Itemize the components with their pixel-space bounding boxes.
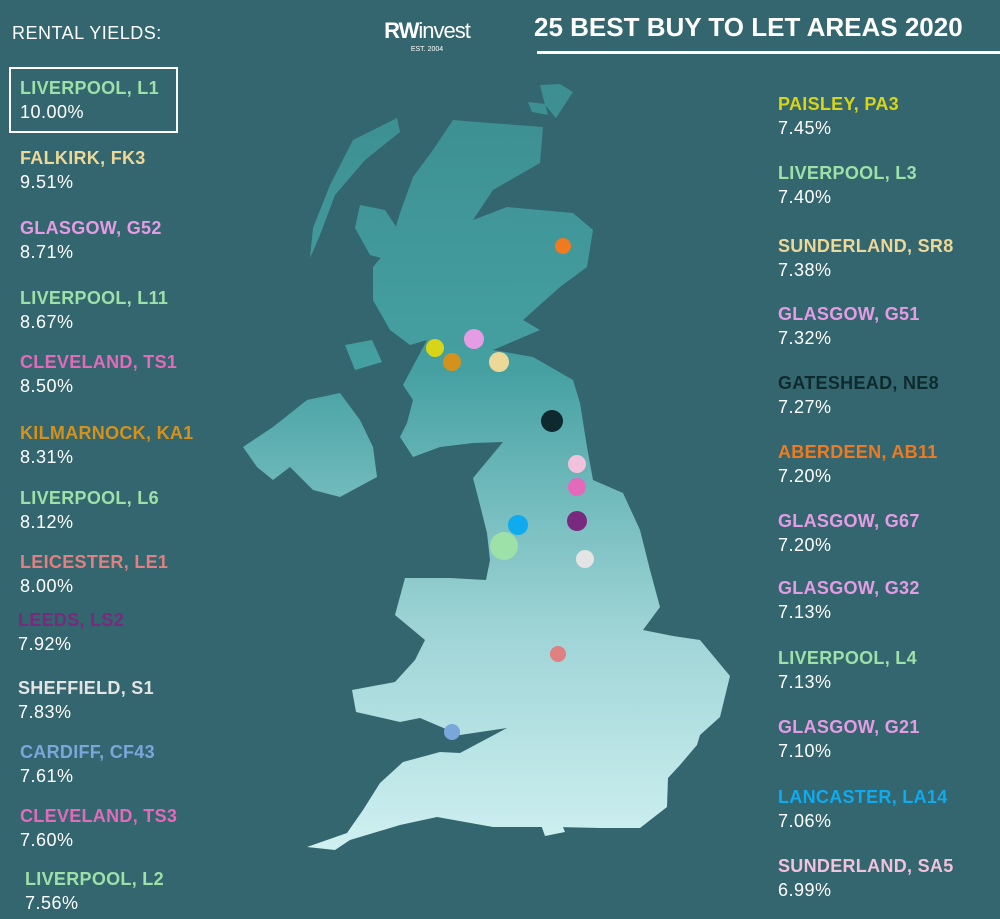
left list: 8.31% xyxy=(20,447,74,467)
right list: SUNDERLAND, SA5 xyxy=(778,856,954,876)
right list xyxy=(778,94,954,900)
left list: SHEFFIELD, S1 xyxy=(18,678,154,698)
right list: 7.13% xyxy=(778,602,832,622)
left list: GLASGOW, G52 xyxy=(20,218,162,238)
left list: 7.83% xyxy=(18,702,72,722)
left list: KILMARNOCK, KA1 xyxy=(20,423,194,443)
left list: LEEDS, LS2 xyxy=(18,610,124,630)
Northern Ireland xyxy=(243,393,377,497)
left list: 9.51% xyxy=(20,172,74,192)
right list: 7.40% xyxy=(778,187,832,207)
right list: 7.45% xyxy=(778,118,832,138)
left list: LEICESTER, LE1 xyxy=(20,552,168,572)
right list: GLASGOW, G32 xyxy=(778,578,920,598)
right list: 7.06% xyxy=(778,811,832,831)
Outer Hebrides xyxy=(310,118,400,258)
right list: PAISLEY, PA3 xyxy=(778,94,899,114)
right list: LANCASTER, LA14 xyxy=(778,787,948,807)
left list: FALKIRK, FK3 xyxy=(20,148,146,168)
left list: 7.60% xyxy=(20,830,74,850)
GB mainland xyxy=(307,120,730,850)
Isle of Wight xyxy=(540,820,565,836)
right list: GATESHEAD, NE8 xyxy=(778,373,939,393)
left list: LIVERPOOL, L11 xyxy=(20,288,168,308)
left list: 8.67% xyxy=(20,312,74,332)
right list: SUNDERLAND, SR8 xyxy=(778,236,954,256)
right list: 7.20% xyxy=(778,466,832,486)
right list: GLASGOW, G21 xyxy=(778,717,920,737)
left list: 10.00% xyxy=(20,102,84,122)
Shetland/Orkney xyxy=(540,84,573,118)
Skye & inner islands xyxy=(355,205,405,262)
right list: GLASGOW, G51 xyxy=(778,304,920,324)
right list: GLASGOW, G67 xyxy=(778,511,920,531)
logo: RWinvest xyxy=(384,18,470,43)
right list: LIVERPOOL, L3 xyxy=(778,163,917,183)
right list: 7.32% xyxy=(778,328,832,348)
left list xyxy=(18,78,194,913)
right list: 7.13% xyxy=(778,672,832,692)
left list: 7.61% xyxy=(20,766,74,786)
right list: 7.38% xyxy=(778,260,832,280)
right list: ABERDEEN, AB11 xyxy=(778,442,938,462)
title: 25 BEST BUY TO LET AREAS 2020 xyxy=(534,12,963,42)
left list: 8.50% xyxy=(20,376,74,396)
right list: 7.10% xyxy=(778,741,832,761)
dots xyxy=(426,238,594,740)
highlight box xyxy=(9,67,178,133)
left list: CLEVELAND, TS1 xyxy=(20,352,177,372)
left list: LIVERPOOL, L6 xyxy=(20,488,159,508)
right list: LIVERPOOL, L4 xyxy=(778,648,917,668)
left list: 8.71% xyxy=(20,242,74,262)
right list: 7.20% xyxy=(778,535,832,555)
right list: 7.27% xyxy=(778,397,832,417)
left list: 7.56% xyxy=(25,893,79,913)
right list: 6.99% xyxy=(778,880,832,900)
heading: rental yields: RENTAL YIELDS: xyxy=(12,23,162,43)
left list: LIVERPOOL, L2 xyxy=(25,869,164,889)
left list: CARDIFF, CF43 xyxy=(20,742,155,762)
left list: 8.00% xyxy=(20,576,74,596)
left list: LIVERPOOL, L1 xyxy=(20,78,159,98)
left list: 8.12% xyxy=(20,512,74,532)
logo: EST. 2004 xyxy=(411,46,443,53)
left list: CLEVELAND, TS3 xyxy=(20,806,177,826)
left list: 7.92% xyxy=(18,634,72,654)
